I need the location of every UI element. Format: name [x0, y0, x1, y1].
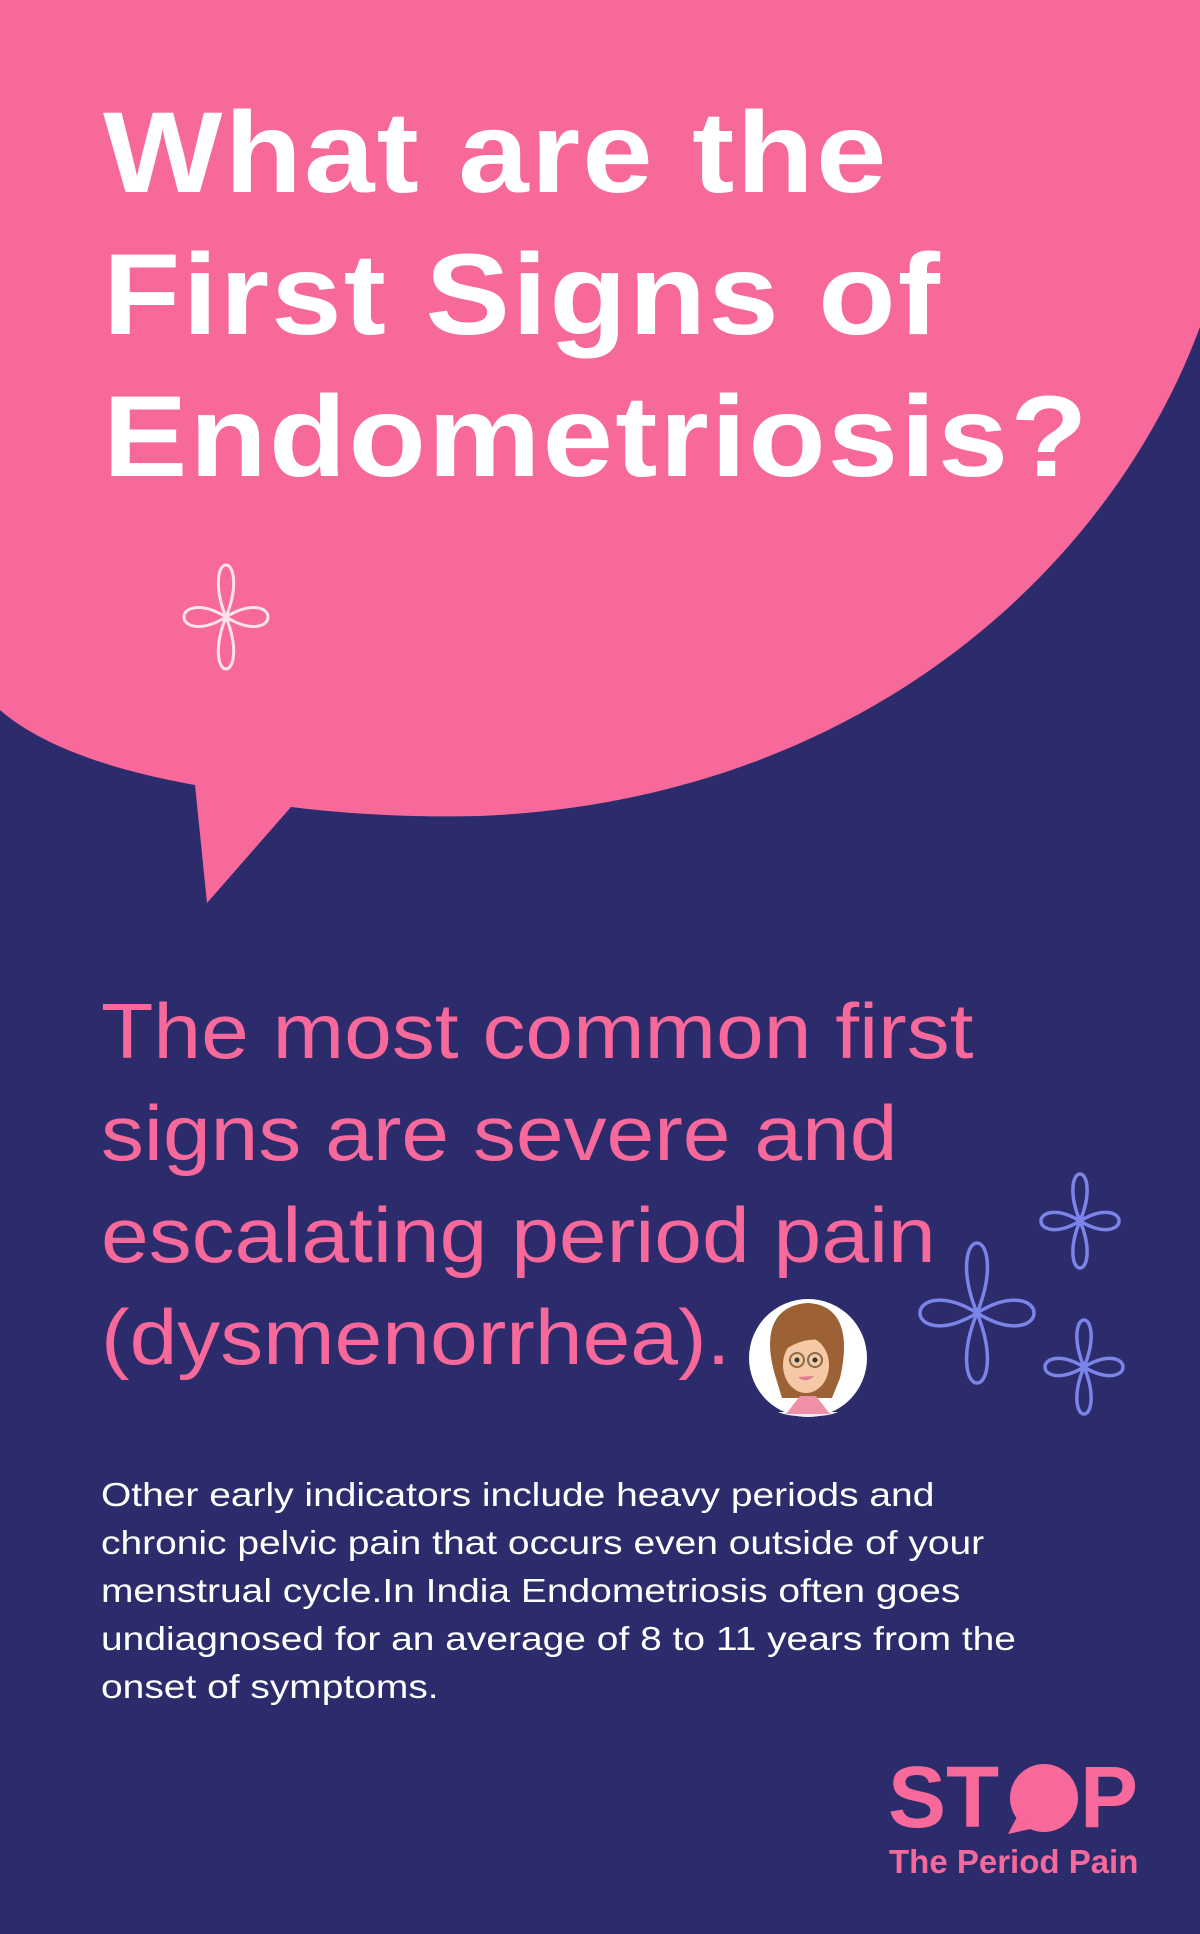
- subtitle: main message: signs are severe and: [101, 1089, 898, 1177]
- logo: ST: [888, 1749, 999, 1846]
- body text: Other early indicators include heavy periods and: [101, 1476, 934, 1513]
- title: [103, 89, 1090, 501]
- speech bubble: [0, 0, 1200, 903]
- body text: undiagnosed for an average of 8 to 11 years from the: [101, 1620, 1016, 1657]
- title: First Signs of: [103, 231, 942, 359]
- body text: onset of symptoms.: [101, 1668, 439, 1705]
- icon: white sparkle: [184, 565, 268, 669]
- title: Endometriosis?: [103, 373, 1090, 501]
- logo: speech bubble O: [1008, 1764, 1078, 1834]
- subtitle: main message: (dysmenorrhea).: [101, 1293, 730, 1381]
- icon: blue sparkles: [920, 1174, 1123, 1414]
- subtitle: main message: [101, 987, 974, 1381]
- title: What are the: [103, 89, 889, 217]
- body text: [101, 1476, 1016, 1705]
- logo: The Period Pain: [889, 1843, 1138, 1880]
- logo: [888, 1749, 1138, 1880]
- icon: doctor avatar: [749, 1299, 867, 1417]
- body text: menstrual cycle.In India Endometriosis often goes: [101, 1572, 960, 1609]
- subtitle: main message: escalating period pain: [101, 1191, 936, 1279]
- subtitle: main message: The most common first: [101, 987, 974, 1075]
- logo: P: [1080, 1749, 1138, 1846]
- body text: chronic pelvic pain that occurs even outside of your: [101, 1524, 984, 1561]
